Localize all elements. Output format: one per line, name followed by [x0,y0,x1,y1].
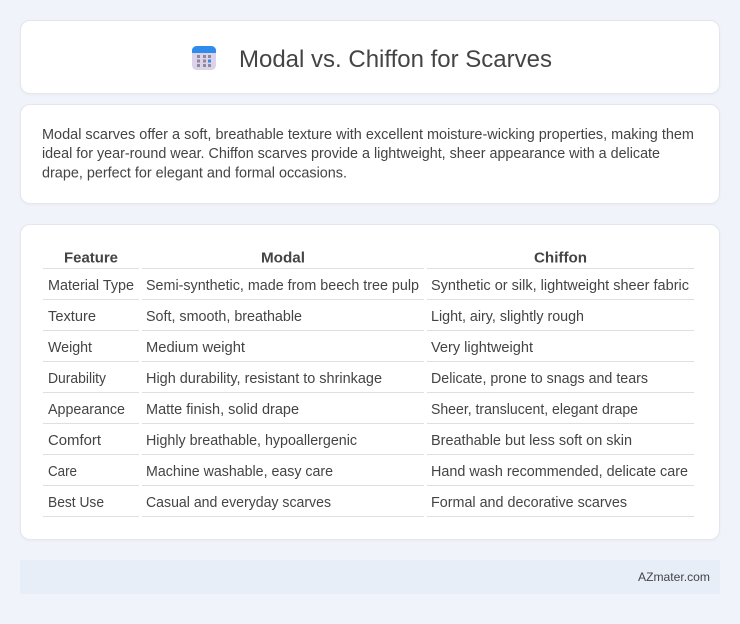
panel: intro text [20,104,720,204]
table rows: Weight [48,340,92,356]
table rows: Light, airy, slightly rough [431,309,584,325]
table rows: Delicate, prone to snags and tears [431,371,648,387]
table rows [48,278,689,511]
intro paragraph: drape, perfect for elegant and formal occasions. [42,166,347,182]
table header: Modal [261,250,305,266]
comparison table [43,250,694,517]
panel: comparison table [20,224,720,540]
intro paragraph: Modal scarves offer a soft, breathable texture with excellent moisture-wicking properties, making them [42,127,694,143]
table rows: Machine washable, easy care [146,464,333,480]
table rows: Appearance [48,402,125,418]
table rows: Best Use [48,495,104,511]
table rows: Semi-synthetic, made from beech tree pulp [146,278,419,294]
intro paragraph [42,127,694,182]
table rows: Breathable but less soft on skin [431,433,632,449]
table rows: Durability [48,371,107,387]
panel: title card [20,20,720,94]
table rows: Casual and everyday scarves [146,495,331,511]
table rows: Sheer, translucent, elegant drape [431,402,638,418]
table rows: Care [48,464,77,480]
table rows: Synthetic or silk, lightweight sheer fabric [431,278,689,294]
table rows: Comfort [48,433,101,449]
table rows: Highly breathable, hypoallergenic [146,433,357,449]
intro paragraph: ideal for year-round wear. Chiffon scarves provide a lightweight, sheer appearance with a delicate [42,146,660,162]
table rows: High durability, resistant to shrinkage [146,371,382,387]
footer bar [20,560,720,594]
table rows: Formal and decorative scarves [431,495,627,511]
table rows: Soft, smooth, breathable [146,309,302,325]
table header [64,250,587,266]
footer credit: AZmater.com [638,570,710,584]
icon: calendar [192,46,216,70]
table header: Feature [64,250,118,266]
table rows: Texture [48,309,96,325]
table rows: Medium weight [146,340,245,356]
table rows: Very lightweight [431,340,533,356]
table rows: Matte finish, solid drape [146,402,299,418]
table rows: Hand wash recommended, delicate care [431,464,688,480]
table header: Chiffon [534,250,587,266]
title: Modal vs. Chiffon for Scarves [239,46,552,73]
table rows: Material Type [48,278,134,294]
